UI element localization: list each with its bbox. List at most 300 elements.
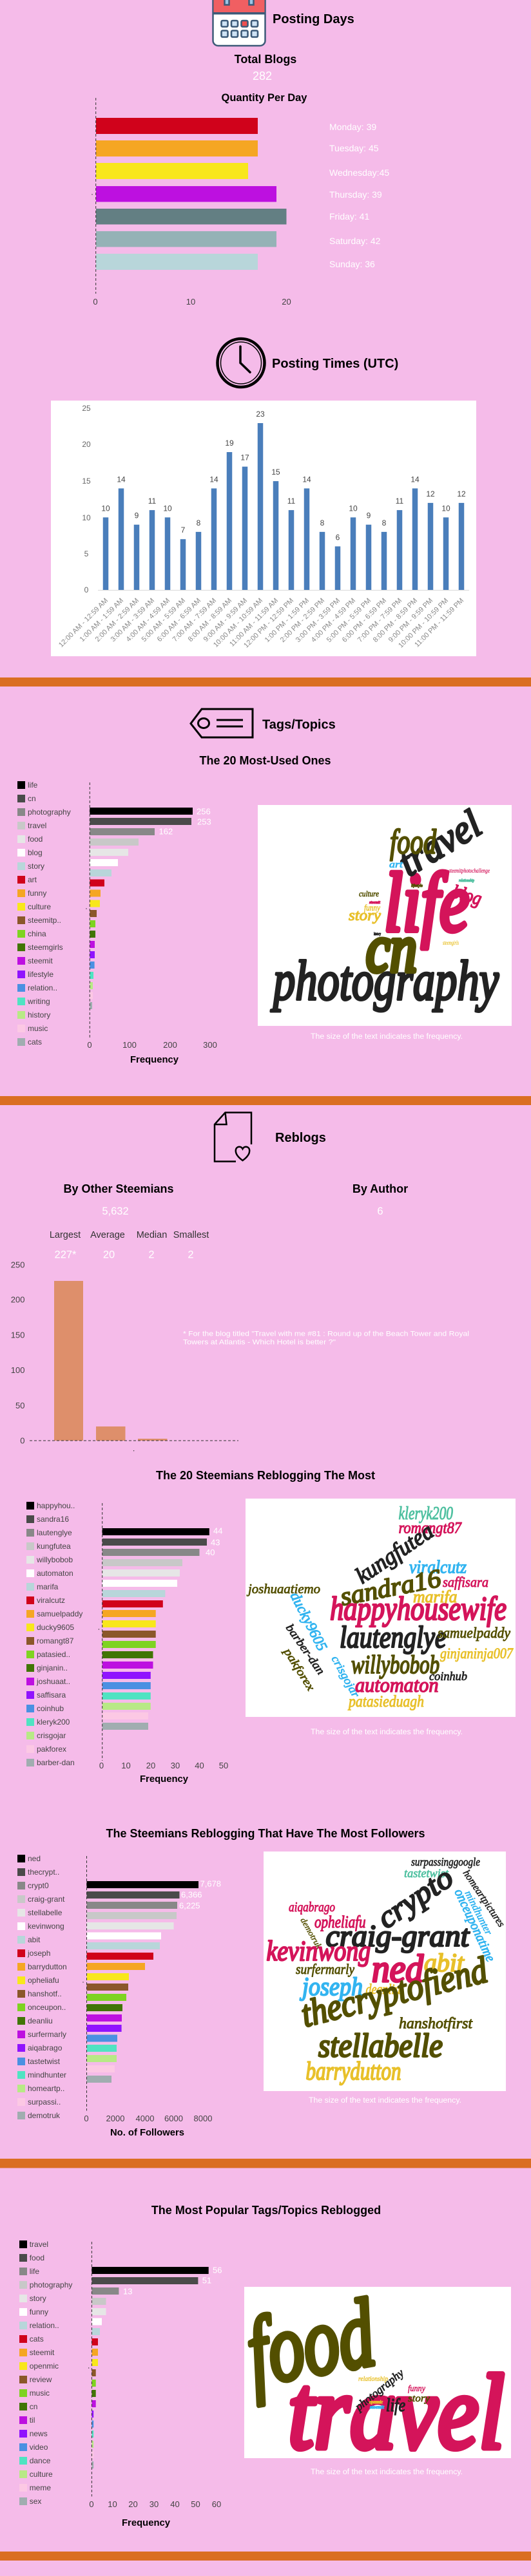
chart panel: posts per hour: 10 [163, 504, 172, 513]
legend: reblogged tags: photography [30, 2280, 72, 2289]
legend: reblogged tags: video [30, 2443, 48, 2452]
bar chart: reblogged tag frequency: 56 [213, 2266, 222, 2275]
word cloud: steemians: romangt87 [398, 1520, 462, 1537]
bar chart: reblog statistics [11, 1260, 238, 1451]
chart panel: posts per hour: 10 [101, 504, 110, 513]
legend: reblogged tags: food [30, 2253, 44, 2262]
word cloud: steemians: viralcutz [409, 1557, 467, 1578]
word cloud: followers: hanshotfirst [399, 2016, 473, 2032]
legend: reblogged tags [19, 2240, 72, 2506]
chart panel: posts per hour: 8 [320, 518, 325, 527]
word cloud: reblogged tags: food [239, 2279, 382, 2406]
chart panel: posts per hour: 4:00 AM - 4:59 AM [125, 597, 171, 643]
legend: steemians: joshuaat.. [36, 1677, 70, 1686]
caption: reblogged tags word cloud: The size of the text indicates the frequency. [311, 2468, 463, 2476]
legend: reblogged tags: culture [30, 2470, 53, 2479]
heading: tags/topics: Tags/Topics [262, 717, 336, 732]
chart panel: posts per hour: 6:00 PM - 6:59 PM [341, 597, 388, 644]
chart panel: posts per hour: 3:00 AM - 3:59 AM [110, 597, 156, 643]
legend: followers: mindhunter [28, 2070, 66, 2079]
legend: reblogged tags: news [30, 2429, 48, 2438]
chart panel: posts per hour: 14 [117, 475, 126, 484]
chart panel: posts per hour: 9 [135, 511, 139, 520]
bar chart: quantity per day [92, 98, 291, 307]
legend: day values: Friday: 41 [329, 211, 369, 222]
legend: tags: blog [28, 848, 43, 857]
legend: followers: tastetwist [28, 2057, 61, 2066]
legend: followers [17, 1854, 67, 2120]
bar chart: reblog statistics: 250 [11, 1260, 24, 1270]
word cloud: followers: onceuponatime [451, 1886, 499, 1964]
word cloud: tags: food [390, 822, 437, 861]
word cloud: steemians: kungfutea [351, 1518, 438, 1589]
bar chart: reblog frequency: Frequency [140, 1774, 189, 1785]
bar chart: number of followers: 6,366 [181, 1889, 202, 1900]
bar chart: quantity per day: 0 [93, 297, 98, 307]
chart panel: posts per hour: 6:00 AM - 6:59 AM [156, 597, 202, 643]
word cloud: steemians [246, 1499, 516, 1717]
stat: total blogs value: 282 [253, 70, 272, 82]
chart panel: posts per hour: 11 [287, 497, 296, 506]
bar chart: reblog frequency: 30 [171, 1761, 180, 1770]
bar chart: number of followers: 4000 [136, 2114, 154, 2123]
bar chart: reblog statistics: 50 [15, 1401, 24, 1410]
legend: followers: crypt0 [28, 1881, 49, 1890]
legend: followers: abit [28, 1935, 41, 1944]
word cloud: followers: barrydutton [305, 2056, 401, 2085]
legend: followers: ned [28, 1854, 41, 1863]
chart panel: posts per hour: 7:00 PM - 7:59 PM [356, 597, 403, 644]
legend: steemians: crisgojar [37, 1731, 66, 1740]
legend: followers: demotruk [28, 2111, 61, 2120]
chart panel: posts per hour: 10 [82, 513, 91, 522]
stat: reblogs by others: 5,632 [102, 1206, 129, 1217]
word cloud: followers: opheliafu [314, 1913, 366, 1931]
word cloud: steemians: sandra16 [338, 1564, 443, 1611]
legend: day values: Tuesday: 45 [329, 143, 379, 153]
bar chart: reblogged tag frequency: 50 [191, 2499, 200, 2509]
chart panel: posts per hour: 5:00 AM - 5:59 AM [140, 597, 187, 643]
bar chart: reblogged tag frequency: 51 [202, 2276, 211, 2285]
word cloud: reblogged tags: photography [351, 2366, 406, 2414]
word cloud: followers: craig-grant [326, 1919, 470, 1953]
reblog statistics: Median [137, 1230, 167, 1240]
chart panel: posts per hour: 14 [209, 475, 218, 484]
legend: steemians: lautenglye [37, 1528, 72, 1537]
legend: tags: story [28, 862, 44, 871]
bar chart: reblog frequency: 44 [213, 1526, 222, 1535]
legend: tags: photography [28, 808, 71, 817]
chart panel: posts per hour [51, 401, 476, 656]
bar chart: reblogged tag frequency: 10 [108, 2499, 117, 2509]
bar chart: number of followers: 8000 [194, 2114, 212, 2123]
reblog statistics: Largest [50, 1230, 81, 1240]
legend: followers: surfermarly [28, 2030, 66, 2039]
word cloud: steemians: ducky9605 [287, 1589, 331, 1653]
legend: reblogged tags: music [30, 2389, 50, 2398]
bar chart: reblogged tag frequency: 20 [128, 2499, 138, 2509]
heading: 20 most-used: The 20 Most-Used Ones [199, 754, 331, 767]
chart panel: posts per hour: 6 [336, 533, 340, 542]
section: most popular tags reblogged [19, 2204, 511, 2528]
legend: steemians: patasied.. [37, 1650, 70, 1659]
legend: reblogged tags: funny [30, 2307, 48, 2316]
heading: total blogs: Total Blogs [235, 53, 296, 66]
bar chart: reblog frequency: 50 [219, 1761, 228, 1770]
chart panel: posts per hour: 8 [197, 518, 201, 527]
legend: tags: music [28, 1024, 48, 1033]
word cloud: tags: steemitphotochallenge [449, 867, 490, 874]
legend: steemians: barber-dan [37, 1758, 75, 1767]
legend: followers: kevinwong [28, 1922, 64, 1931]
chart panel: posts per hour: 11 [148, 497, 157, 506]
word cloud: steemians: coinhub [429, 1670, 467, 1683]
word cloud: steemians: ginjaninja007 [440, 1645, 514, 1662]
word cloud: tags: art [389, 860, 403, 870]
chart panel: posts per hour: 15 [82, 477, 91, 486]
caption: tags word cloud: The size of the text indicates the frequency. [311, 1033, 463, 1041]
chart panel: posts per hour: 8 [382, 518, 387, 527]
bar chart: reblogged tag frequency: 30 [150, 2499, 159, 2509]
legend: steemians: romangt87 [37, 1636, 74, 1645]
legend: day values: Monday: 39 [329, 122, 376, 132]
bar chart: reblogged tag frequency: 13 [123, 2286, 132, 2297]
chart panel: posts per hour: 12 [426, 489, 435, 498]
word cloud: tags: steemit [369, 901, 380, 905]
legend: steemians: viralcutz [37, 1596, 65, 1605]
legend: followers: craig-grant [28, 1895, 65, 1904]
word cloud: followers: deanliu [366, 1981, 401, 1997]
bar chart: quantity per day: 10 [186, 297, 195, 307]
legend: day values: Thursday: 39 [329, 189, 382, 200]
word cloud: steemians: pakforex [280, 1645, 318, 1693]
word cloud: followers: stellabelle [318, 2027, 443, 2065]
word cloud: followers: homeartpictures [461, 1868, 507, 1929]
reblog statistics: Smallest [173, 1230, 209, 1240]
word cloud: followers: demotruk [298, 1916, 324, 1951]
legend: steemians: automaton [37, 1569, 73, 1578]
word cloud: steemians: crisgojar [329, 1653, 363, 1700]
chart panel: posts per hour: 10 [349, 504, 358, 513]
chart panel: posts per hour: 11 [396, 497, 404, 506]
bar chart: reblog statistics: 150 [11, 1331, 24, 1340]
chart panel: posts per hour: 10:00 AM - 10:59 AM [212, 597, 264, 649]
legend: followers: aiqabrago [28, 2043, 63, 2052]
chart panel: posts per hour: 25 [82, 404, 91, 413]
legend: tags: art [28, 875, 37, 884]
legend: day values: Sunday: 36 [329, 259, 375, 269]
chart panel: posts per hour: 17 [240, 453, 249, 462]
bar chart: tag frequency: 256 [197, 806, 211, 817]
legend: steemians: pakforex [37, 1745, 66, 1754]
heading: The 20 Steemians Reblogging The Most [156, 1469, 375, 1482]
reblog statistics: 2 [188, 1249, 194, 1261]
chart panel: posts per hour: 9 [367, 511, 371, 520]
section: steemians with most followers [17, 1827, 507, 2138]
legend: tags: life [28, 781, 38, 790]
legend: tags: steemgirls [28, 943, 63, 952]
heading: posting days: Posting Days [273, 12, 354, 26]
chart panel: posts per hour: 10:00 PM - 10:59 PM [397, 597, 450, 650]
legend: day values: Wednesday:45 [329, 167, 389, 178]
chart panel: posts per hour: 5 [84, 549, 89, 558]
legend: tags: steemitp.. [28, 916, 61, 925]
icon: clock [218, 339, 264, 387]
word cloud: tags: cn [366, 911, 417, 986]
chart panel: posts per hour: 9:00 PM - 9:59 PM [387, 597, 434, 644]
bar chart: reblogged tag frequency: 0 [89, 2499, 94, 2509]
chart panel: posts per hour: 12:00 PM - 12:59 PM [242, 597, 295, 650]
word cloud: tags: funny [364, 904, 381, 913]
heading: by author: By Author [352, 1182, 408, 1195]
legend: reblogged tags: review [30, 2375, 52, 2384]
chart panel: posts per hour: 12 [457, 489, 466, 498]
legend: reblogged tags: sex [30, 2497, 41, 2506]
legend: followers: onceupon.. [28, 2003, 66, 2012]
chart panel: posts per hour: 15 [271, 468, 280, 477]
chart panel: posts per hour: 14 [410, 475, 420, 484]
legend: followers: joseph [27, 1949, 50, 1958]
bar chart: tag frequency: 253 [197, 817, 211, 827]
legend: steemians: ginjanin.. [37, 1663, 68, 1672]
legend: steemians: happyhou.. [37, 1501, 75, 1510]
chart panel: posts per hour: 23 [256, 410, 265, 419]
word cloud: reblogged tags: openmic [369, 2400, 383, 2405]
word cloud: reblogged tags: steemit [370, 2405, 385, 2410]
chart panel: posts per hour: 2:00 PM - 2:59 PM [279, 597, 326, 644]
chart panel: posts per hour: 3:00 PM - 3:59 PM [294, 597, 342, 644]
word cloud: tags: lifestyle [411, 884, 423, 888]
legend: followers: surpassi.. [28, 2098, 61, 2107]
footnote: largest reblog: Towers at Atlantis - Which Hotel is better ?" [183, 1338, 336, 1346]
legend: steemians: sandra16 [37, 1515, 69, 1524]
bar chart: tag frequency: 300 [203, 1040, 217, 1050]
legend: followers: homeartp.. [28, 2084, 64, 2093]
word cloud: reblogged tags: story [408, 2393, 430, 2404]
word cloud: steemians: kleryk200 [398, 1504, 453, 1524]
legend: reblogged tags: til [30, 2416, 35, 2425]
legend: tags: culture [28, 902, 51, 911]
legend: followers: deanliu [28, 2016, 53, 2025]
heading: by other steemians: By Other Steemians [63, 1182, 174, 1195]
chart panel: posts per hour: 4:00 PM - 4:59 PM [310, 597, 357, 644]
heading: posting times: Posting Times (UTC) [272, 357, 398, 371]
chart panel: posts per hour: 8:00 PM - 8:59 PM [372, 597, 419, 644]
word cloud: tags: travel [391, 802, 489, 885]
bar chart: reblogged tag frequency: 60 [212, 2499, 221, 2509]
bar chart: reblogged tag frequency [88, 2242, 222, 2528]
word cloud: steemians: barber-dan [284, 1622, 327, 1677]
chart panel: posts per hour: 10 [441, 504, 450, 513]
legend: followers: stellabelle [28, 1908, 63, 1917]
legend: reblogged tags: relation.. [30, 2321, 59, 2330]
bar chart: reblog frequency [99, 1503, 228, 1785]
reblog statistics: 227* [55, 1249, 77, 1261]
footnote: largest reblog: * For the blog titled "Travel with me #81 : Round up of the Beach Tower and Royal [183, 1331, 469, 1338]
word cloud: reblogged tags: life [386, 2396, 405, 2416]
footnote: largest reblog [183, 1331, 469, 1346]
legend: reblogged tags: meme [30, 2483, 51, 2492]
word cloud: followers: kevinwong [267, 1935, 371, 1967]
chart panel: posts per hour: 19 [225, 439, 234, 448]
heading: The Most Popular Tags/Topics Reblogged [151, 2204, 381, 2217]
word cloud: followers: ned [372, 1947, 424, 1990]
icon: price tag [191, 709, 253, 737]
section: posting days [92, 0, 389, 307]
chart panel: posts per hour: 1:00 AM - 1:59 AM [79, 597, 125, 643]
word cloud: reblogged tags: funny [408, 2384, 426, 2394]
legend: tags: steemit [28, 956, 53, 965]
legend: tags: travel [28, 821, 46, 830]
legend: steemians: samuelpaddy [37, 1609, 82, 1618]
icon: document with heart [215, 1113, 251, 1162]
caption: followers word cloud: The size of the text indicates the frequency. [309, 2097, 461, 2105]
chart panel: posts per hour: 14 [302, 475, 311, 484]
bar chart: number of followers: 2000 [106, 2114, 124, 2123]
stat: reblogs by author: 6 [377, 1206, 383, 1217]
chart panel: posts per hour: 9:00 AM - 9:59 AM [202, 597, 249, 643]
reblog statistics [50, 1230, 209, 1261]
word cloud: tags: story [349, 907, 381, 924]
bar chart: tag frequency: 0 [87, 1040, 92, 1050]
legend: reblogged tags: dance [30, 2456, 51, 2465]
legend: steemians: kleryk200 [37, 1718, 70, 1727]
chart panel: posts per hour: 12:00 AM - 12:59 AM [57, 597, 110, 649]
reblog statistics: 2 [148, 1249, 155, 1261]
heading: quantity per day: Quantity Per Day [222, 92, 307, 104]
heading: reblogs: Reblogs [275, 1131, 326, 1145]
legend: tags: lifestyle [28, 970, 53, 979]
word cloud: tags: life [384, 857, 469, 949]
legend: steemians: saffisara [37, 1690, 66, 1700]
legend: reblogged tags: life [30, 2267, 39, 2276]
legend: reblogged tags: story [30, 2294, 46, 2303]
bar chart: reblog frequency: 43 [211, 1538, 220, 1547]
word cloud: steemians: lautenglye [340, 1620, 446, 1654]
legend: day values: Saturday: 42 [329, 236, 381, 246]
word cloud: reblogged tags: relationship [358, 2375, 388, 2383]
word cloud: reblogged tags: travel [288, 2353, 505, 2471]
section: tags and topics [17, 709, 512, 1065]
bar chart: reblogged tag frequency: Frequency [122, 2517, 171, 2528]
chart panel: posts per hour: 1:00 PM - 1:59 PM [264, 597, 311, 644]
word cloud: tags: steemgirls [443, 940, 459, 946]
legend: steemians: coinhub [37, 1704, 64, 1713]
word cloud: steemians: joshuaatiemo [246, 1581, 320, 1596]
word cloud: steemians: automaton [355, 1673, 438, 1696]
chart panel: posts per hour: 11:00 PM - 11:59 PM [413, 597, 465, 649]
bar chart: tag frequency: 100 [122, 1040, 137, 1050]
word cloud: steemians: willybobob [351, 1650, 439, 1679]
word cloud: followers [264, 1852, 507, 2091]
word cloud: steemians: samuelpaddy [438, 1625, 511, 1641]
word cloud: followers: abit [424, 1948, 465, 1977]
bar chart: reblog frequency: 10 [121, 1761, 131, 1770]
bar chart: tag frequency [86, 782, 217, 1065]
chart panel: posts per hour: 0 [84, 585, 89, 594]
word cloud: steemians: saffisara [443, 1574, 488, 1590]
legend: tags: relation.. [28, 983, 57, 992]
bar chart: reblog frequency: 40 [206, 1548, 215, 1557]
legend: tags: china [28, 929, 46, 938]
chart panel: posts per hour: 8:00 AM - 8:59 AM [187, 597, 233, 643]
bar chart: number of followers: 6,225 [179, 1901, 200, 1910]
section: posting times [51, 339, 476, 656]
bar chart: number of followers: 0 [84, 2114, 89, 2123]
chart panel: posts per hour: 7 [181, 526, 186, 535]
bar chart: tag frequency: 200 [163, 1040, 177, 1050]
chart panel: posts per hour: 5:00 PM - 5:59 PM [325, 597, 372, 644]
chart panel: posts per hour: 7:00 AM - 7:59 AM [171, 597, 218, 643]
legend: reblogged tags: steemit [30, 2348, 55, 2357]
legend: tags: funny [28, 889, 46, 898]
legend: followers: thecrypt.. [28, 1868, 59, 1877]
word cloud: followers: surfermarly [296, 1961, 354, 1977]
word cloud: reblogged tags [239, 2279, 511, 2471]
legend: steemians: willybobob [36, 1555, 73, 1564]
chart panel: posts per hour: 2:00 AM - 2:59 AM [94, 597, 140, 643]
section: 20 steemians reblogging the most [26, 1469, 516, 1785]
legend: followers: opheliafu [28, 1976, 59, 1985]
word cloud: followers: mindhunter [462, 1889, 494, 1937]
bar chart: tag frequency: 162 [159, 827, 173, 836]
bar chart: number of followers [82, 1856, 221, 2138]
legend: steemians: marifa [37, 1582, 59, 1591]
word cloud: followers: joseph [299, 1972, 363, 2001]
word cloud: tags: culture [359, 889, 379, 898]
caption: steemians word cloud: The size of the text indicates the frequency. [311, 1728, 463, 1736]
bar chart: number of followers: 7,678 [200, 1879, 221, 1888]
legend: tags [17, 781, 71, 1046]
bar chart: reblog statistics: 100 [11, 1365, 24, 1375]
word cloud: tags: relationship [459, 879, 474, 883]
word cloud: followers: surpassinggoogle [411, 1855, 480, 1868]
word cloud: steemians: marifa [413, 1587, 458, 1606]
word cloud: tags [258, 802, 512, 1026]
bar chart: reblog frequency: 0 [99, 1761, 104, 1770]
legend: reblogged tags: cats [30, 2334, 44, 2344]
legend: tags: writing [27, 997, 50, 1006]
legend: tags: history [28, 1010, 50, 1019]
bar chart: tag frequency: Frequency [130, 1054, 179, 1065]
bar chart: number of followers: No. of Followers [110, 2127, 184, 2138]
legend: reblogged tags: travel [30, 2240, 48, 2249]
legend: steemians: ducky9605 [37, 1623, 74, 1632]
bar chart: reblogged tag frequency: 40 [170, 2499, 180, 2509]
legend: day values [329, 122, 389, 269]
bar chart: reblog frequency: 20 [146, 1761, 155, 1770]
section: reblogs [11, 1113, 469, 1451]
word cloud: steemians: patasieduagh [347, 1693, 424, 1710]
chart panel: posts per hour: 20 [82, 440, 91, 449]
bar chart: reblog frequency: 40 [195, 1761, 204, 1770]
bar chart: reblog statistics: 0 [20, 1436, 24, 1445]
legend: reblogged tags: cn [30, 2402, 37, 2411]
heading: The Steemians Reblogging That Have The Most Followers [106, 1827, 425, 1840]
legend: steemians [26, 1501, 82, 1767]
icon: calendar [213, 0, 266, 46]
reblog statistics: Average [90, 1230, 125, 1240]
legend: followers: barrydutton [28, 1962, 67, 1971]
legend: steemians: kungfutea [37, 1542, 71, 1551]
legend: tags: cats [28, 1037, 42, 1046]
legend: followers: hanshotf.. [28, 1989, 62, 1998]
reblog statistics: 20 [103, 1249, 115, 1261]
word cloud: tags: blog [450, 881, 484, 909]
legend: tags: food [28, 835, 43, 844]
legend: tags: cn [28, 794, 36, 803]
word cloud: followers: aiqabrago [289, 1899, 335, 1915]
